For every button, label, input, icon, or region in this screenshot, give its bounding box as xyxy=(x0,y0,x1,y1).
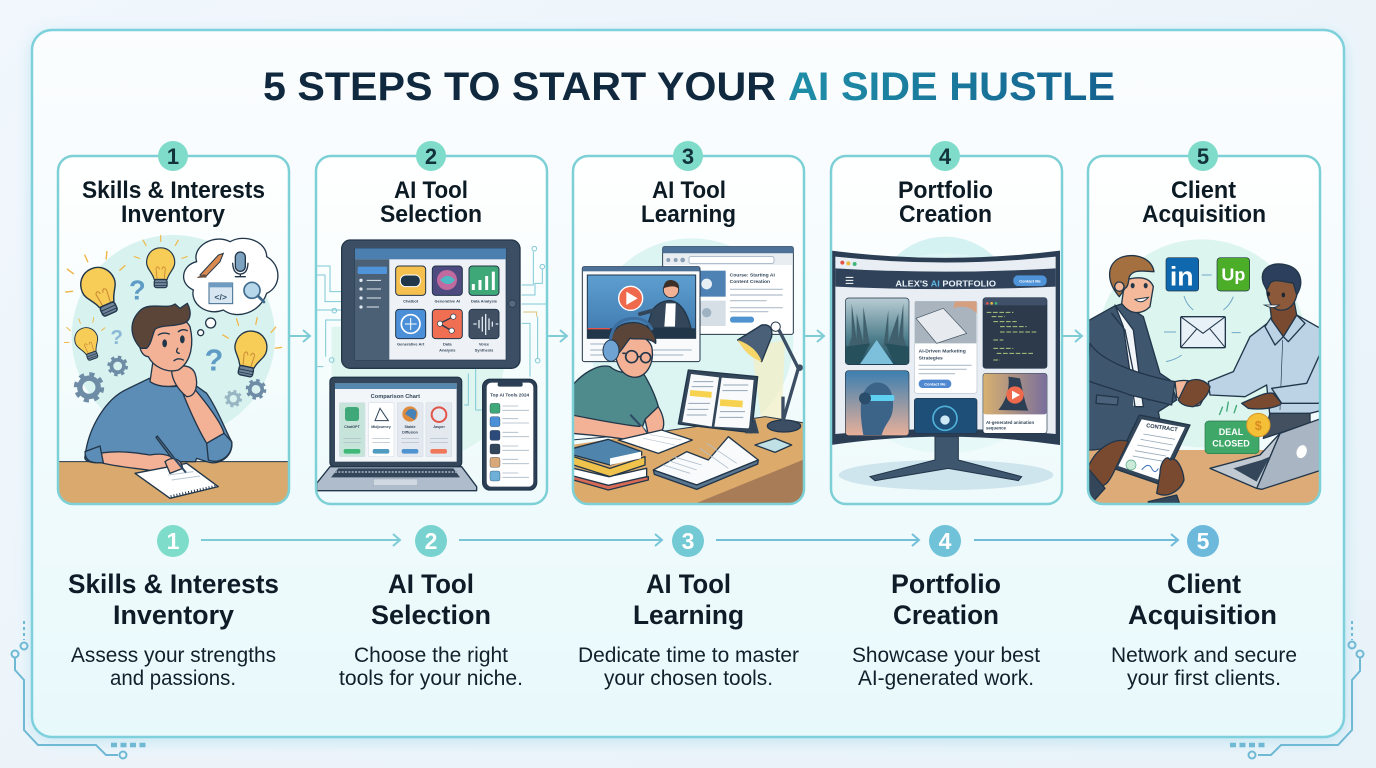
social icons xyxy=(1166,258,1199,291)
step 5 summary: Acquisition xyxy=(1128,600,1277,630)
illustration: devices: ChatGPT xyxy=(344,425,361,429)
illustration: thinking person: ? xyxy=(129,274,146,305)
card frame xyxy=(58,156,289,504)
books xyxy=(573,473,648,490)
card heading: Portfolio xyxy=(898,177,993,204)
step 1 summary xyxy=(68,525,279,690)
step 5 summary: Network and secure xyxy=(1111,644,1297,667)
step 1 summary: Assess your strengths xyxy=(71,644,276,667)
illustration: thinking person xyxy=(55,235,293,505)
step 5 summary: your first clients. xyxy=(1127,667,1281,690)
laptop xyxy=(1257,418,1322,489)
step 3 summary xyxy=(578,525,799,690)
illustration: learner at desk: Content Creation xyxy=(730,279,770,285)
step 4 summary xyxy=(852,525,1040,690)
step 2 summary: Choose the right xyxy=(354,644,508,667)
client with suit xyxy=(1087,303,1177,450)
number badge: 5 xyxy=(1197,144,1209,169)
contract tablet xyxy=(1113,415,1190,485)
step 5 summary xyxy=(1111,525,1297,690)
desk xyxy=(572,417,807,505)
card heading: AI Tool xyxy=(652,177,726,204)
illustration: client handshake: CONTRACT xyxy=(1146,423,1178,434)
step 3 summary: AI Tool xyxy=(646,569,731,599)
step 1 summary: and passions. xyxy=(110,667,236,690)
partner in shirt xyxy=(1208,315,1323,417)
panel: step 5 card xyxy=(1085,141,1323,505)
step 2 summary xyxy=(339,525,523,690)
step 4 summary: AI-generated work. xyxy=(858,667,1034,690)
illustration: devices: Midjourney xyxy=(371,425,392,429)
illustration: devices: Stable xyxy=(405,425,415,429)
card heading xyxy=(82,177,265,228)
card heading xyxy=(1142,177,1266,228)
right circuit decoration xyxy=(1230,621,1364,758)
notepad xyxy=(135,463,218,498)
card heading: Skills & Interests xyxy=(82,177,265,204)
number badge xyxy=(416,141,446,171)
progress arrows xyxy=(201,534,1178,546)
head xyxy=(139,317,192,371)
card heading: Learning xyxy=(641,201,736,228)
panel: step 3 card xyxy=(570,141,807,505)
illustration: portfolio monitor: Strategies xyxy=(919,355,943,361)
illustration: client handshake: Up xyxy=(1221,264,1245,284)
number badge xyxy=(930,141,960,171)
illustration: devices: Analysis xyxy=(439,348,456,353)
course window xyxy=(663,247,793,334)
number badge xyxy=(158,141,188,171)
card heading xyxy=(380,177,482,228)
card heading: Selection xyxy=(380,201,482,228)
step 2 summary: 2 xyxy=(425,528,437,554)
deal closed badge xyxy=(1219,402,1237,415)
number badge xyxy=(673,141,703,171)
step 3 summary: Dedicate time to master xyxy=(578,644,799,667)
step 4 summary: Showcase your best xyxy=(852,644,1040,667)
connector arrows between cards xyxy=(290,330,1082,342)
illustration: portfolio monitor: AI-Driven Marketing xyxy=(919,349,966,355)
panel: step 2 card xyxy=(315,141,548,504)
illustration: devices: Jasper xyxy=(433,425,445,429)
illustration: client handshake: in xyxy=(1170,262,1194,292)
notes paper xyxy=(618,430,692,453)
illustration: learner at desk: Course: Starting AI xyxy=(730,273,776,279)
envelope xyxy=(1181,317,1225,348)
handshake xyxy=(1175,380,1208,406)
illustration: thinking person: ? xyxy=(205,344,223,378)
illustration: thinking person: </> xyxy=(214,292,227,302)
card heading: AI Tool xyxy=(394,177,468,204)
sweater and body xyxy=(85,378,232,463)
lamp xyxy=(779,330,798,423)
step 4 summary: Creation xyxy=(893,600,999,630)
illustration: client handshake: DEAL xyxy=(1219,427,1244,437)
step 3 summary: 3 xyxy=(682,528,694,554)
title: 5 STEPS TO START YOUR xyxy=(263,65,776,109)
card heading xyxy=(898,177,993,228)
illustration: client handshake xyxy=(1085,239,1323,505)
phone on desk xyxy=(755,438,792,452)
article card xyxy=(914,301,977,393)
thought cloud xyxy=(184,238,278,315)
illustration: devices: Voice xyxy=(479,342,490,347)
step 1 summary: Skills & Interests xyxy=(68,569,279,599)
panel: step 1 card xyxy=(55,141,293,505)
illustration: portfolio monitor: ALEX'S AI PORTFOLIO xyxy=(895,279,997,289)
step 1 summary: Inventory xyxy=(113,600,234,630)
phone xyxy=(483,379,537,490)
step 1 summary: 1 xyxy=(167,528,180,554)
illustration: learner at desk xyxy=(570,238,807,505)
tablet reader xyxy=(678,370,758,433)
illustration: devices: Data xyxy=(443,342,452,347)
robot image xyxy=(845,371,909,436)
illustration: devices: Data Analysis xyxy=(471,298,498,303)
open book xyxy=(653,437,758,485)
card frame xyxy=(316,156,547,504)
illustration: devices: Top AI Tools 2024 xyxy=(490,393,530,398)
illustration: portfolio monitor: sequence xyxy=(986,425,1007,430)
step 2 summary: tools for your niche. xyxy=(339,667,523,690)
card frame xyxy=(1088,156,1320,504)
video window xyxy=(582,267,700,362)
title: AI SIDE HUSTLE xyxy=(788,65,1115,109)
card heading: Creation xyxy=(899,201,992,228)
step 4 summary: Portfolio xyxy=(891,569,1001,599)
video card xyxy=(983,373,1047,433)
number badge: 1 xyxy=(167,144,179,169)
left circuit decoration xyxy=(12,621,146,758)
illustration: thinking person: ? xyxy=(110,326,123,349)
illustration: portfolio monitor: Contact Me xyxy=(924,381,947,386)
illustration: devices: Diffusion xyxy=(402,430,418,434)
step 3 summary: Learning xyxy=(633,600,744,630)
card heading: Inventory xyxy=(121,201,226,228)
illustration: devices: Generative AI xyxy=(435,298,460,303)
step 3 summary: your chosen tools. xyxy=(604,667,773,690)
step 5 summary: 5 xyxy=(1197,528,1210,554)
person xyxy=(574,365,659,427)
number badge: 2 xyxy=(425,144,437,169)
number badge: 4 xyxy=(939,144,952,169)
illustration: portfolio monitor: Contact Me xyxy=(1019,278,1042,283)
tablet xyxy=(342,240,520,368)
card heading: Client xyxy=(1171,177,1236,204)
card frame xyxy=(831,156,1062,504)
city image xyxy=(845,298,909,365)
illustration: devices xyxy=(315,240,548,491)
illustration: client handshake: $ xyxy=(1255,419,1262,433)
illustration: devices: Comparison Chart xyxy=(371,394,420,400)
illustration: client handshake: CLOSED xyxy=(1212,439,1250,449)
number badge: 3 xyxy=(682,144,694,169)
illustration: portfolio monitor: AI-generated animation xyxy=(986,420,1034,425)
illustration: devices: Generative Art xyxy=(397,342,425,347)
card heading xyxy=(641,177,736,228)
neck and raised arm xyxy=(149,363,176,388)
step 5 summary: Client xyxy=(1167,569,1241,599)
laptop xyxy=(330,377,462,467)
card heading: Acquisition xyxy=(1142,201,1266,228)
shield image xyxy=(914,398,977,433)
step 2 summary: AI Tool xyxy=(388,569,474,599)
illustration: portfolio monitor xyxy=(831,237,1061,490)
step 4 summary: 4 xyxy=(939,528,952,554)
illustration: devices: Synthesis xyxy=(475,348,494,353)
number badge xyxy=(1188,141,1218,171)
title xyxy=(263,65,1115,109)
card frame xyxy=(573,156,804,504)
illustration: devices: Chatbot xyxy=(403,298,419,303)
panel: step 4 card xyxy=(831,141,1062,504)
code card xyxy=(983,298,1047,368)
step 2 summary: Selection xyxy=(371,600,491,630)
